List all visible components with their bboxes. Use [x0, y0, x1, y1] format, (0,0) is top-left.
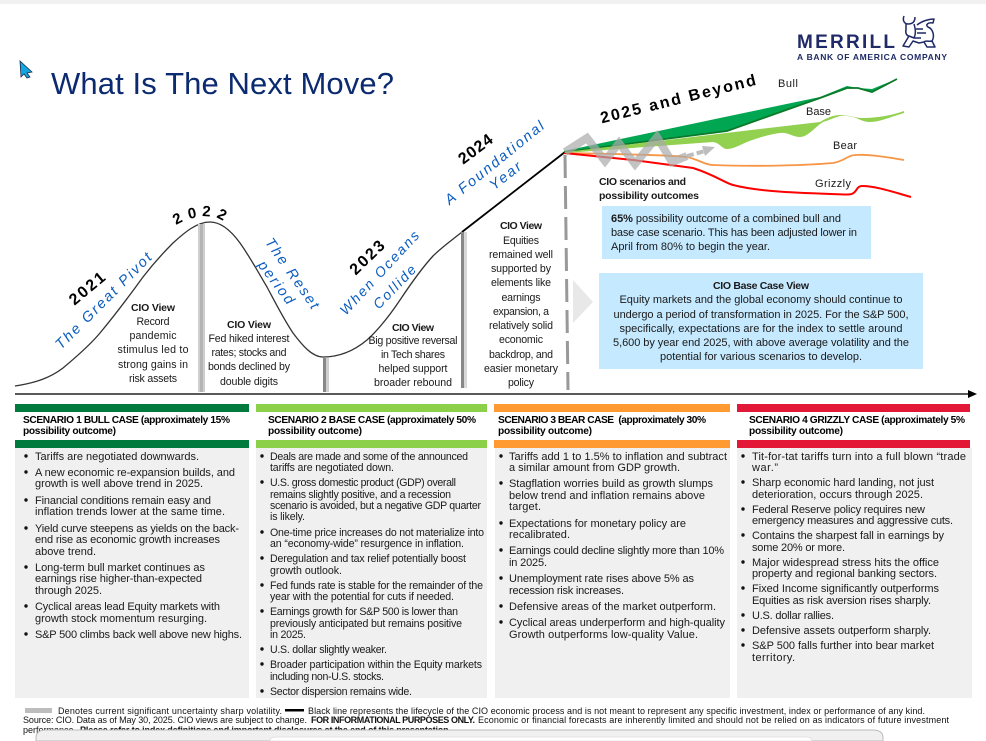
callout: CIO base case view: 5,600 by year end 2025, with above average volatility and the — [613, 337, 909, 349]
heading: base case: SCENARIO 2 BASE CASE (approximately 50% — [268, 415, 476, 426]
bullets: bear case: a similar amount from GDP growth. — [509, 462, 680, 474]
CIO view: 2024: economic — [499, 334, 544, 346]
label: 2021: 2021 — [66, 268, 110, 309]
legend and source footnote: Economic or financial forecasts are inherently limited and should not be relied on as indicators of future investment — [478, 715, 949, 725]
label: The Reset period: The Reset — [261, 235, 323, 314]
bullets: grizzly case: emergency measures and aggressive cuts. — [752, 515, 953, 527]
bullets: grizzly case: Defensive assets outperform sharply. — [752, 625, 931, 637]
bullets: base case: in 2025. — [270, 629, 306, 641]
bullets: base case: is likely. — [270, 511, 305, 523]
CIO view: 2022 — [208, 319, 291, 388]
panel: scenario 2 base case — [256, 404, 487, 698]
bullets: bull case: above trend. — [35, 546, 96, 558]
label: When Oceans Collide: When Oceans — [336, 226, 424, 318]
heading: bull case — [23, 415, 230, 437]
icon: cursor arrow — [20, 61, 32, 78]
bullets: base case: an “economy-wide” resurgence in inflation. — [270, 538, 464, 550]
bullets: base case: Deregulation and tax relief potentially boost — [270, 553, 466, 565]
label: The Great Pivot: The Great Pivot — [53, 249, 157, 353]
CIO view: 2023: CIO View — [392, 322, 435, 334]
bullets: bull case: Yield curve steepens as yields on the back- — [35, 523, 239, 535]
heading: grizzly case — [749, 415, 965, 437]
bullets: bear case — [499, 451, 727, 641]
callout: 65% possibility: base case scenario. This has been adjusted lower in — [611, 227, 857, 239]
bullets: bear case: Expectations for monetary policy are — [509, 518, 686, 530]
CIO view: 2024: relatively solid — [489, 320, 553, 332]
bullets: base case: U.S. gross domestic product (GDP) overall — [270, 477, 456, 489]
bullets: base case: Fed funds rate is stable for the remainder of the — [270, 580, 483, 592]
bullets: bear case: Growth outperforms low-quality Value. — [509, 629, 698, 641]
CIO view: 2024: expansion, a — [493, 306, 549, 318]
bullets: base case: previously anticipated but remains positive — [270, 618, 462, 630]
bullets: bull case: S&P 500 climbs back well above new highs. — [35, 629, 242, 641]
label: A Foundational Year: A Foundational — [441, 117, 549, 209]
CIO view: 2024: easier monetary — [484, 363, 559, 375]
scenario labels — [778, 78, 857, 190]
bullets: bear case: recession risk increases. — [509, 585, 624, 597]
panel: scenario 3 bear case — [494, 404, 730, 698]
CIO view: 2022: double digits — [220, 376, 278, 388]
CIO view: 2021: pandemic — [130, 330, 177, 342]
panel: scenario 1 bull case — [15, 404, 249, 698]
bullets: grizzly case — [741, 451, 966, 664]
callout: CIO base case view: CIO Base Case View — [713, 280, 810, 292]
heading: CIO scenarios — [599, 176, 699, 202]
overlay: rounded grey panel — [36, 730, 883, 741]
bullets: bear case: Tariffs add 1 to 1.5% to inflation and subtract — [509, 451, 727, 463]
bullets: base case: scenario is avoided, but a negative GDP quarter — [270, 500, 481, 512]
heading: grizzly case: SCENARIO 4 GRIZZLY CASE (approximately 5% — [749, 415, 965, 426]
bullets: base case: tariffs are negotiated down. — [270, 462, 394, 474]
legend and source footnote: performance. — [23, 725, 76, 735]
scenario labels: Bear — [833, 140, 857, 152]
callout: 65% possibility: April from 80% to begin the year. — [611, 241, 770, 253]
bullets: grizzly case: Contains the sharpest fall in earnings by — [752, 530, 944, 542]
callout: CIO base case view: Equity markets and the global economy should continue to — [620, 294, 902, 306]
bullets: bull case: A new economic re-expansion builds, and — [35, 467, 235, 479]
scenario labels: Grizzly — [815, 178, 852, 190]
bullets: bull case: Long-term bull market continues as — [35, 562, 206, 574]
bullets: bear case: in 2025. — [509, 557, 547, 569]
scenario labels: Bull — [778, 78, 798, 90]
bullets: bull case: inflation trends lower at the same time. — [35, 506, 225, 518]
label: 2025 and Beyond: 2025 and Beyond — [599, 72, 760, 127]
CIO view: 2024: remained well — [489, 249, 553, 261]
heading: base case: possibility outcome) — [268, 426, 362, 437]
bullets: grizzly case: Tit-for-tat tariffs turn into a full blown “trade — [752, 451, 966, 463]
title: What Is The Next Move? — [51, 66, 394, 101]
bullets: base case — [260, 451, 484, 698]
area: base — [565, 111, 904, 153]
bullets: grizzly case: property and regional banking sectors. — [752, 568, 937, 580]
CIO view: 2021 — [118, 302, 189, 385]
bullets: bear case: target. — [509, 501, 541, 513]
logo: Merrill: MERRILL — [797, 32, 895, 53]
CIO view: 2022: rates; stocks and — [212, 347, 287, 359]
callout: CIO base case view — [599, 273, 923, 369]
bullets: bear case: below trend and inflation remains above — [509, 490, 705, 502]
bullets: base case: U.S. dollar slightly weaker. — [270, 644, 387, 656]
bullets: base case: remains slightly positive, and a recession — [270, 489, 451, 501]
CIO view: 2023: helped support — [378, 363, 448, 375]
bullets: grizzly case: Major widespread stress hits the office — [752, 557, 939, 569]
CIO view: 2023 — [368, 322, 458, 389]
bullets: base case: Sector dispersion remains wide. — [270, 686, 412, 698]
label: When Oceans Collide: Collide — [370, 260, 420, 312]
CIO view: 2021: strong gains in — [118, 359, 188, 371]
bullets: bull case — [24, 451, 242, 641]
bullets: base case: year with the potential for cuts if needed. — [270, 591, 454, 603]
bullets: bull case: Financial conditions remain easy and — [35, 495, 211, 507]
bullets: grizzly case: Sharp economic hard landing, not just — [752, 477, 934, 489]
heading: CIO scenarios: possibility outcomes — [599, 190, 699, 202]
bullets: bull case: end rise as economic growth increases — [35, 534, 220, 546]
label: 2022: 2022 — [170, 203, 229, 229]
panel: scenario 4 grizzly case — [737, 404, 972, 698]
bullets: grizzly case: some 20% or more. — [752, 542, 845, 554]
CIO view: 2023: in Tech shares — [381, 349, 445, 361]
CIO view: 2024: backdrop, and — [489, 349, 553, 361]
CIO view: 2022: bonds declined by — [208, 361, 291, 373]
legend and source footnote: Source: CIO. Data as of May 30, 2025. CIO views are subject to change. — [23, 715, 307, 725]
lifecycle curve — [15, 152, 565, 386]
bullets: base case: growth outlook. — [270, 565, 342, 577]
heading: bull case: SCENARIO 1 BULL CASE (approximately 15% — [23, 415, 230, 426]
zigzag: uncertainty — [565, 137, 687, 164]
legend and source footnote: Black line represents the lifecycle of the CIO economic process and is not meant to represent any specific investment, index or performance of any kind. — [308, 706, 925, 716]
bullets: bear case: Cyclical areas underperform and high-quality — [509, 617, 726, 629]
bullets: grizzly case: Fixed Income significantly outperforms — [752, 583, 940, 595]
label: A Foundational Year: Year — [487, 158, 526, 194]
arrow: dashed volatility — [687, 146, 715, 156]
CIO view: 2023: broader rebound — [374, 377, 452, 389]
bullets: base case: Earnings growth for S&P 500 is lower than — [270, 606, 458, 618]
bullets: bull case: growth stock momentum resurging. — [35, 613, 207, 625]
CIO view: 2024: Equities — [503, 235, 539, 247]
chart: scenario paths — [564, 79, 911, 197]
CIO view: 2024: elements like — [491, 277, 551, 289]
CIO view: 2023: Big positive reversal — [368, 335, 458, 347]
bullets: grizzly case: war.” — [751, 462, 778, 474]
logo: Merrill: A BANK OF AMERICA COMPANY — [797, 52, 947, 62]
heading: CIO scenarios: CIO scenarios and — [599, 176, 686, 188]
callout: CIO base case view: undergo a period of transformation in 2025. For the S&P 500, — [614, 309, 908, 321]
bullets: bull case: Cyclical areas lead Equity markets with — [35, 601, 220, 613]
bullets: grizzly case: territory. — [752, 652, 795, 664]
legend and source footnote: Please refer to index definitions and important disclosures at the end of this presentation. — [80, 725, 451, 735]
line: bear — [564, 153, 904, 166]
CIO view: 2021: risk assets — [129, 373, 177, 385]
CIO view: 2024: policy — [508, 377, 535, 389]
bullets: base case: Broader participation within the Equity markets — [270, 659, 482, 671]
callout: 65% possibility: 65% possibility outcome of a combined bull and — [611, 213, 841, 225]
timeline axis arrow — [15, 390, 977, 398]
bullets: base case: including non-U.S. stocks. — [270, 671, 384, 683]
scenario labels: Base — [806, 106, 831, 118]
label: 2024: 2024 — [455, 131, 497, 168]
callout: 65% possibility — [602, 206, 871, 259]
line: grizzly — [564, 153, 911, 197]
legend and source footnote — [23, 706, 949, 735]
logo: Merrill — [797, 16, 947, 62]
CIO view: 2022: CIO View — [227, 319, 272, 331]
CIO view: 2024: earnings — [502, 292, 540, 304]
heading: grizzly case: possibility outcome) — [749, 426, 843, 437]
CIO view: 2021: stimulus led to — [118, 344, 189, 356]
CIO view: 2024: supported by — [491, 263, 552, 275]
uncertainty bars — [198, 155, 568, 392]
CIO view: 2024 — [484, 220, 559, 389]
bullets: bull case: growth is well above trend in 2025. — [35, 478, 203, 490]
heading: bear case: possibility outcome) — [498, 426, 592, 437]
bullets: grizzly case: U.S. dollar rallies. — [752, 610, 834, 622]
heading: bear case: SCENARIO 3 BEAR CASE (approximately 30% — [498, 415, 706, 426]
legend and source footnote: FOR INFORMATIONAL PURPOSES ONLY. — [311, 715, 475, 725]
bullets: grizzly case: S&P 500 falls further into bear market — [752, 640, 934, 652]
heading: base case — [268, 415, 476, 437]
icon: grey chevron — [573, 280, 593, 323]
area: bull — [564, 79, 897, 152]
bullets: base case: Deals are made and some of the announced — [270, 451, 468, 463]
bullets: bear case: recalibrated. — [509, 529, 570, 541]
bullets: bull case: through 2025. — [35, 585, 102, 597]
CIO view: 2024: CIO View — [500, 220, 543, 232]
callout: CIO base case view: potential for various scenarios to develop. — [660, 351, 862, 363]
CIO view: 2022: Fed hiked interest — [208, 333, 290, 345]
bullets: grizzly case: Federal Reserve policy requires new — [752, 504, 925, 516]
bullets: bear case: Earnings could decline slightly more than 10% — [509, 545, 724, 557]
bullets: bear case: Defensive areas of the market outperform. — [509, 601, 716, 613]
icon: bull — [903, 16, 935, 47]
legend and source footnote: Denotes current significant uncertainty sharp volatility. — [58, 706, 282, 716]
callout: CIO base case view: specifically, expectations are for the index to settle around — [620, 323, 902, 335]
label: The Reset period: period — [253, 257, 298, 309]
bullets: grizzly case: Equities as risk aversion rises sharply. — [752, 595, 931, 607]
bullets: bear case: Stagflation worries build as growth slumps — [509, 478, 714, 490]
bullets: base case: One-time price increases do not materialize into — [270, 527, 484, 539]
heading: bear case — [498, 415, 706, 437]
bullets: bear case: Unemployment rate rises above 5% as — [509, 573, 694, 585]
label: 2023: 2023 — [347, 236, 390, 279]
bullets: bull case: earnings rise higher-than-expected — [35, 573, 202, 585]
bullets: bull case: Tariffs are negotiated downwards. — [35, 451, 199, 463]
bullets: grizzly case: deterioration, occurs through 2025. — [752, 489, 923, 501]
heading: bull case: possibility outcome) — [23, 426, 116, 437]
CIO view: 2021: CIO View — [131, 302, 176, 314]
CIO view: 2021: Record — [136, 316, 170, 328]
